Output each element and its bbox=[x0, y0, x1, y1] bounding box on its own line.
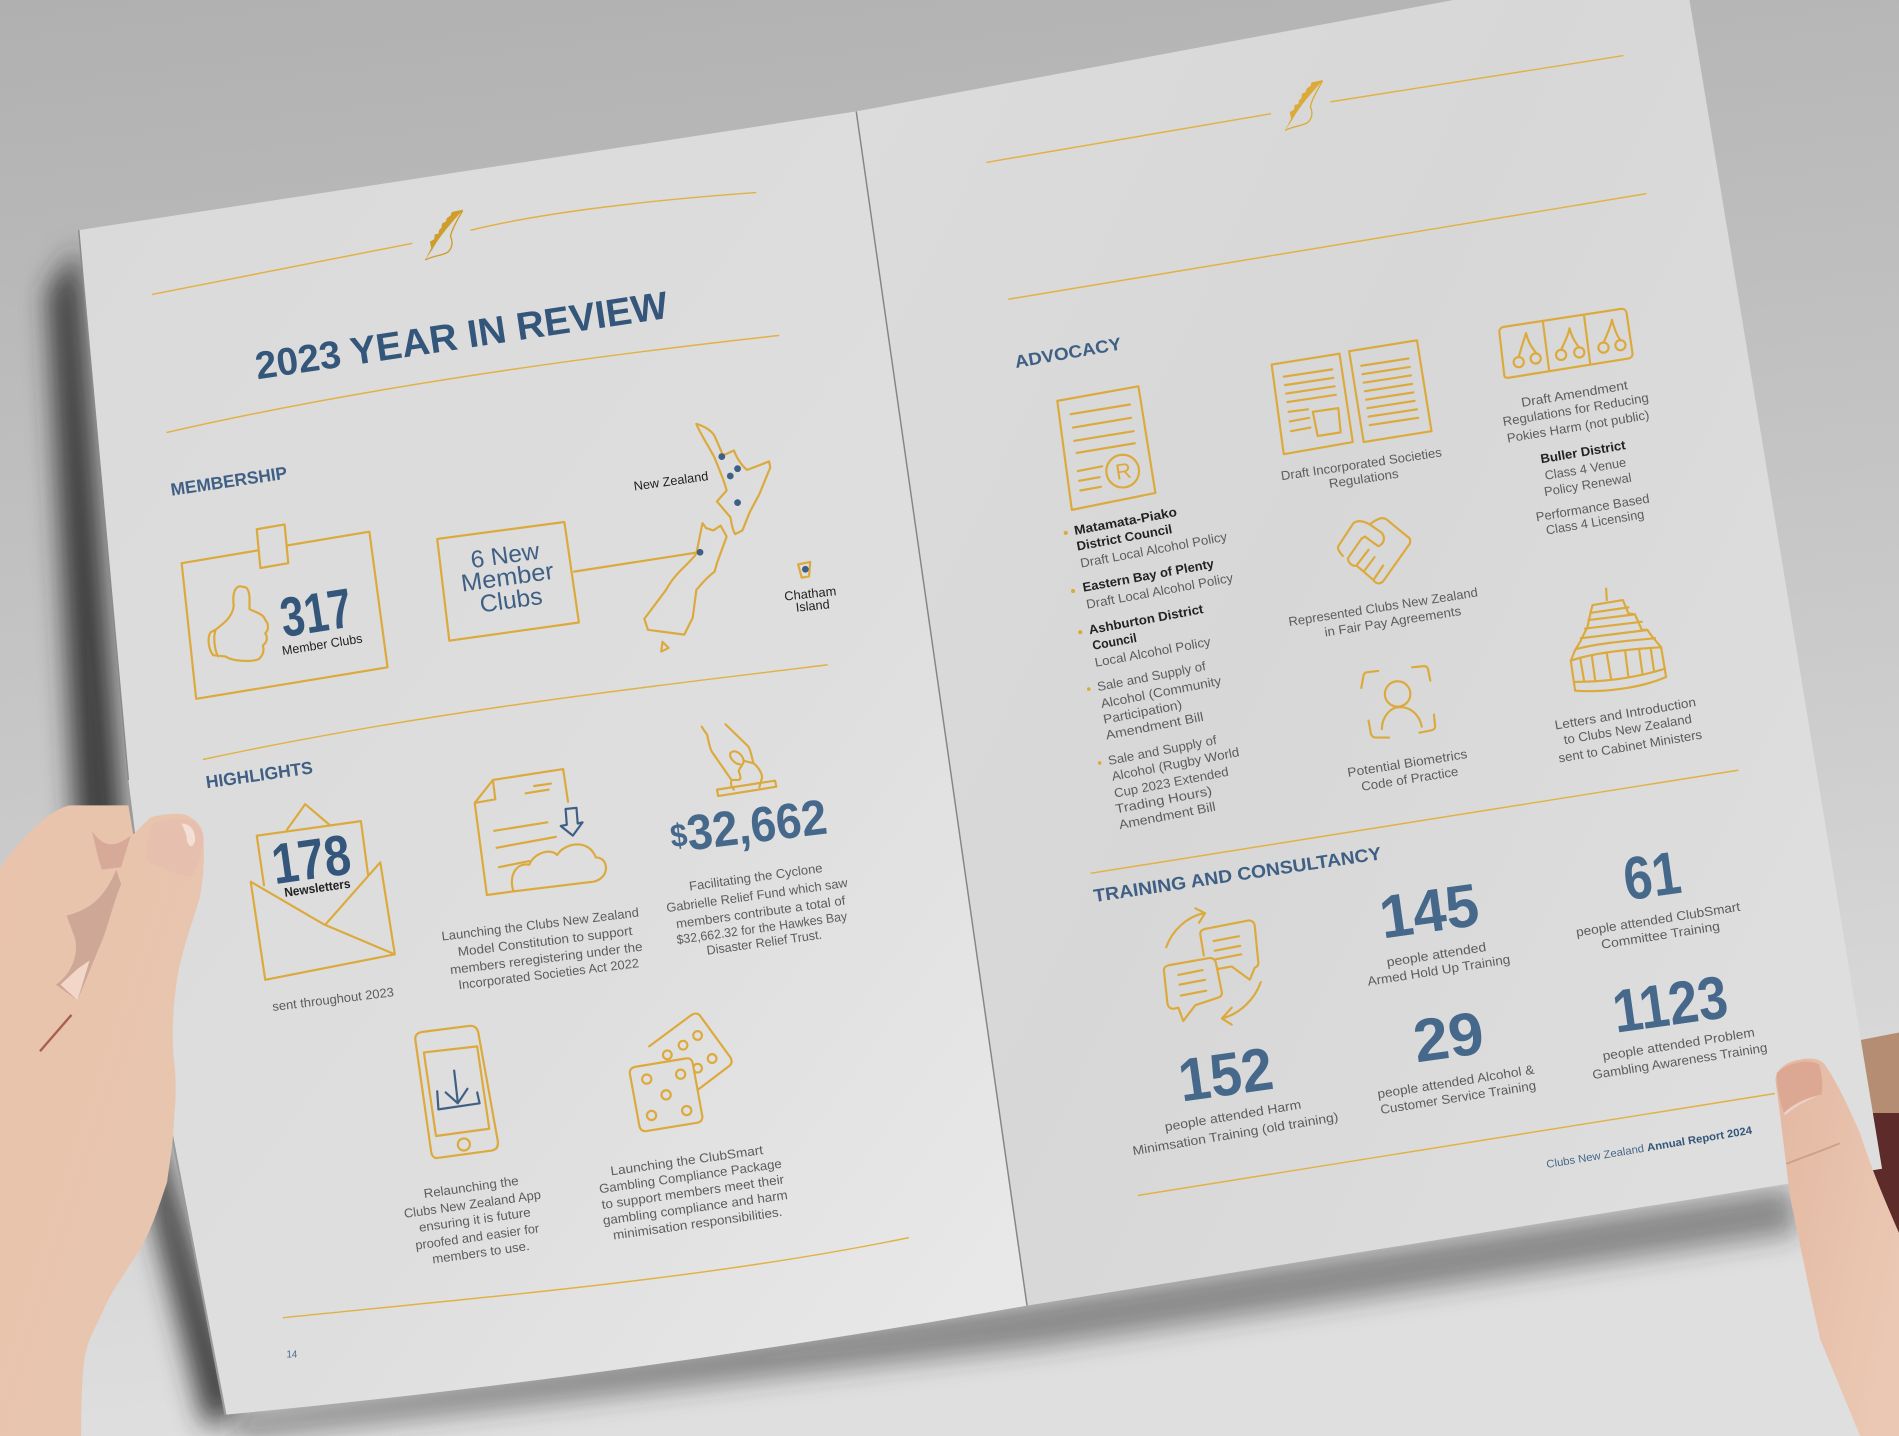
text: relief fund: Facilitating the Cyclone bbox=[688, 860, 823, 894]
new member clubs box: Member bbox=[459, 558, 556, 598]
stat: 1123 gambling awareness: people attended Problem bbox=[1601, 1025, 1756, 1063]
map labels: Island bbox=[795, 596, 830, 615]
list: local policies and bills bbox=[1064, 504, 1240, 832]
icon: document to cloud bbox=[475, 769, 606, 895]
icon: thumbs up bbox=[209, 586, 268, 661]
text: cabinet ministers: to Clubs New Zealand bbox=[1563, 711, 1693, 747]
stat: 152 harm minimisation: Minimsation Training (old training) bbox=[1131, 1109, 1339, 1158]
stat: 152 harm minimisation: 152 bbox=[1174, 1034, 1277, 1114]
map of New Zealand bbox=[644, 424, 810, 652]
text: app bbox=[403, 1173, 542, 1267]
text: app: Clubs New Zealand App bbox=[403, 1187, 542, 1221]
text: model constitution: Incorporated Societies Act 2022 bbox=[458, 955, 640, 992]
stat: 61 committee: 61 bbox=[1619, 838, 1685, 913]
stat: 1123 gambling awareness: Gambling Awareness Training bbox=[1591, 1040, 1768, 1082]
icon: envelope newsletters: 178 bbox=[268, 823, 355, 897]
membership badge bbox=[182, 524, 388, 699]
new member clubs box: Clubs bbox=[478, 583, 544, 618]
icon: hand dropping coin bbox=[702, 724, 776, 796]
icon: dice bbox=[630, 1014, 732, 1131]
text: incorporated societies: Regulations bbox=[1328, 466, 1400, 491]
text: model constitution: Launching the Clubs New Zealand bbox=[441, 905, 640, 944]
icon: envelope newsletters bbox=[251, 804, 395, 980]
page sheet bbox=[79, 111, 1027, 1415]
header rules bbox=[153, 193, 779, 432]
text: relief fund: $32,662.32 for the Hawkes Bay bbox=[676, 908, 849, 947]
text: pokies and venue policies: Buller District bbox=[1539, 437, 1627, 466]
connector line bbox=[574, 552, 699, 572]
book shadow: left bbox=[48, 248, 242, 1429]
stat: relief fund amount: $32,662 bbox=[667, 789, 830, 863]
divider bbox=[203, 665, 827, 759]
text: biometrics: Potential Biometrics bbox=[1346, 746, 1468, 780]
text: pokies and venue policies: Regulations for Reducing bbox=[1502, 390, 1650, 429]
list: local policies and bills: Sale and Supply of bbox=[1107, 732, 1218, 768]
list: local policies and bills: Council bbox=[1091, 630, 1138, 653]
text: app: Relaunching the bbox=[423, 1173, 520, 1201]
panel: left page bbox=[79, 111, 1027, 1415]
icon: open book bbox=[1272, 340, 1432, 454]
list: local policies and bills: Cup 2023 Extended bbox=[1113, 764, 1230, 801]
list: local policies and bills: Draft Local Alcohol Policy bbox=[1079, 529, 1229, 571]
text: pokies and venue policies: Performance Based bbox=[1535, 491, 1651, 524]
list: local policies and bills: Participation) bbox=[1102, 697, 1183, 727]
stat: 61 committee: Committee Training bbox=[1600, 918, 1721, 952]
text: app: ensuring it is future bbox=[418, 1204, 532, 1235]
text: model constitution: Model Constitution to support bbox=[457, 923, 634, 959]
map labels: Chatham bbox=[784, 583, 837, 604]
bottom rule bbox=[283, 1238, 908, 1318]
text: pokies and venue policies: Class 4 Licensing bbox=[1545, 506, 1645, 538]
list: local policies and bills: Amendment Bill bbox=[1104, 709, 1205, 742]
text: relief fund: members contribute a total of bbox=[675, 893, 847, 931]
feather logo bbox=[1285, 80, 1323, 130]
text: sent throughout: sent throughout 2023 bbox=[271, 984, 395, 1014]
text: compliance package: gambling compliance and harm bbox=[602, 1187, 789, 1228]
book shadow: bottom bbox=[230, 1187, 1798, 1436]
text: compliance package: Launching the ClubSmart bbox=[609, 1142, 764, 1178]
icon: handshake bbox=[1338, 518, 1410, 583]
stat: 1123 gambling awareness: 1123 bbox=[1608, 962, 1732, 1046]
finger fold shading bbox=[92, 831, 131, 870]
stat: 29 alcohol service: Customer Service Training bbox=[1379, 1078, 1537, 1117]
list: local policies and bills: Matamata-Piako bbox=[1073, 504, 1178, 538]
text: fair pay: in Fair Pay Agreements bbox=[1323, 603, 1462, 640]
stat: 152 harm minimisation: people attended Harm bbox=[1164, 1097, 1302, 1134]
stat: 145 armed hold up bbox=[1366, 870, 1511, 989]
bottom rule bbox=[1138, 1094, 1774, 1195]
text: relief fund: Disaster Relief Trust. bbox=[706, 927, 823, 958]
list: local policies and bills: District Council bbox=[1075, 521, 1173, 554]
list: local policies and bills: Amendment Bill bbox=[1118, 799, 1217, 832]
icon: registered document bbox=[1057, 386, 1155, 510]
text: relief fund bbox=[665, 860, 849, 958]
stat: 145 armed hold up: Armed Hold Up Training bbox=[1366, 951, 1511, 989]
list: local policies and bills: Sale and Supply of bbox=[1096, 658, 1207, 694]
map labels: New Zealand bbox=[633, 468, 709, 493]
text: model constitution bbox=[441, 905, 643, 992]
icon: beehive parliament bbox=[1571, 589, 1666, 691]
list: local policies and bills: Eastern Bay of Plenty bbox=[1081, 556, 1215, 595]
new member clubs box: 6 New bbox=[469, 538, 542, 574]
text: app: members to use. bbox=[431, 1238, 530, 1267]
page number: 14 bbox=[286, 1350, 298, 1361]
icon: chat bubbles bbox=[1164, 908, 1261, 1025]
text: cabinet ministers bbox=[1554, 694, 1703, 765]
text: compliance package: Gambling Compliance Package bbox=[598, 1156, 783, 1196]
thumbnail bbox=[147, 819, 203, 877]
stat: 145 armed hold up: 145 bbox=[1375, 870, 1483, 951]
divider bbox=[1091, 770, 1738, 873]
feather logo bbox=[425, 210, 463, 260]
text: compliance package: to support members meet their bbox=[601, 1171, 786, 1212]
icon: phone download bbox=[415, 1026, 498, 1158]
stat: 29 alcohol service: people attended Alcohol & bbox=[1376, 1062, 1536, 1101]
hand: left bbox=[0, 805, 204, 1436]
left edge bbox=[79, 230, 128, 780]
stat: 29 alcohol service bbox=[1376, 998, 1537, 1117]
text: app: proofed and easier for bbox=[414, 1220, 541, 1253]
icon: face recognition bbox=[1361, 666, 1435, 738]
heading: highlights: HIGHLIGHTS bbox=[204, 757, 314, 792]
thumb bbox=[1775, 1059, 1899, 1436]
thumbnail bbox=[1777, 1062, 1822, 1113]
header rules bbox=[987, 56, 1646, 299]
stat: 29 alcohol service: 29 bbox=[1409, 998, 1488, 1075]
footer: Clubs New Zealand Annual Report 2024 bbox=[1546, 1125, 1753, 1171]
list: local policies and bills: Ashburton District bbox=[1087, 601, 1205, 637]
list: local policies and bills: Trading Hours) bbox=[1114, 783, 1213, 816]
text: cabinet ministers: sent to Cabinet Ministers bbox=[1557, 727, 1703, 765]
text: biometrics bbox=[1346, 746, 1468, 794]
membership badge: Member Clubs bbox=[281, 631, 363, 658]
heading: training and consultancy: TRAINING AND CONSULTANCY bbox=[1092, 843, 1383, 906]
spine bbox=[856, 111, 1027, 1306]
text: fair pay: Represented Clubs New Zealand bbox=[1287, 584, 1479, 629]
text: compliance package bbox=[598, 1142, 789, 1243]
list: local policies and bills: Local Alcohol Policy bbox=[1093, 634, 1212, 670]
stat: 152 harm minimisation bbox=[1131, 1034, 1339, 1158]
text: pokies and venue policies: Policy Renewal bbox=[1543, 470, 1633, 499]
fingers behind page bbox=[1853, 1032, 1899, 1247]
stat: 61 committee bbox=[1575, 838, 1742, 952]
title: 2023 YEAR IN REVIEW bbox=[252, 284, 671, 388]
stat: 145 armed hold up: people attended bbox=[1386, 939, 1487, 970]
new member clubs box bbox=[437, 522, 579, 641]
list: local policies and bills: Alcohol (Community bbox=[1099, 673, 1223, 711]
list: local policies and bills: Draft Local Alcohol Policy bbox=[1085, 570, 1235, 612]
icon: pokie reels bbox=[1499, 309, 1633, 378]
icon: registered document: R bbox=[1114, 458, 1133, 485]
text: relief fund: Gabrielle Relief Fund which saw bbox=[665, 875, 849, 915]
icon: envelope newsletters: Newsletters bbox=[283, 876, 351, 900]
stat: 61 committee: people attended ClubSmart bbox=[1575, 899, 1742, 940]
text: model constitution: members reregistering under the bbox=[449, 939, 643, 977]
page stack edge bbox=[128, 780, 226, 1415]
hand: right bbox=[1775, 1059, 1899, 1436]
heading: membership: MEMBERSHIP bbox=[169, 463, 289, 500]
text: cabinet ministers: Letters and Introduction bbox=[1554, 694, 1697, 733]
stat: 1123 gambling awareness bbox=[1591, 962, 1768, 1082]
text: compliance package: minimisation responsibilities. bbox=[612, 1204, 783, 1243]
heading: advocacy: ADVOCACY bbox=[1013, 333, 1123, 372]
text: biometrics: Code of Practice bbox=[1360, 764, 1459, 794]
text: incorporated societies: Draft Incorporated Societies bbox=[1280, 444, 1443, 483]
panel: right page bbox=[856, 0, 1882, 1306]
map labels bbox=[633, 468, 837, 615]
text: pokies and venue policies: Draft Amendment bbox=[1520, 377, 1629, 410]
membership badge: 317 bbox=[276, 577, 356, 649]
text: pokies and venue policies bbox=[1502, 377, 1651, 538]
text: pokies and venue policies: Pokies Harm (not public) bbox=[1506, 407, 1650, 446]
page sheet bbox=[856, 0, 1882, 1306]
list: local policies and bills: Alcohol (Rugby World bbox=[1110, 744, 1240, 784]
text: pokies and venue policies: Class 4 Venue bbox=[1543, 455, 1627, 483]
